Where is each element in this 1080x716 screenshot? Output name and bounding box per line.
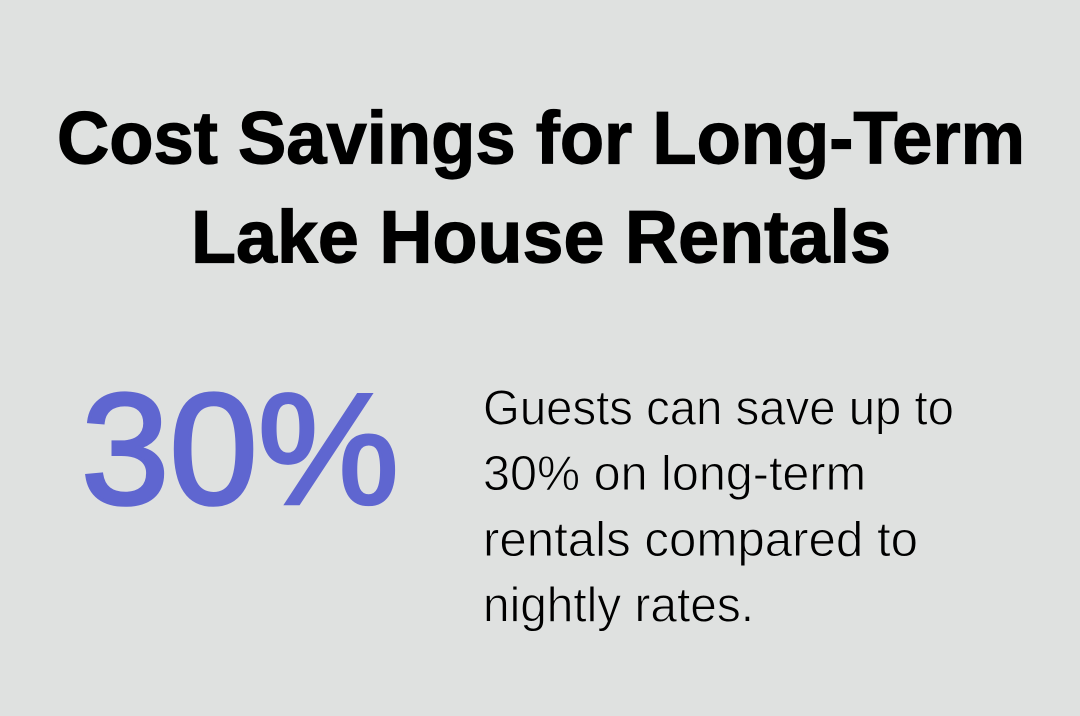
description text: 30% on long-term	[483, 446, 866, 501]
description text: nightly rates.	[483, 578, 754, 632]
description text: Guests can save up to	[483, 380, 954, 436]
description text	[483, 380, 954, 632]
description text: rentals compared to	[483, 512, 918, 567]
big stat: 30%: 30%	[81, 362, 399, 538]
title: Lake House Rentals	[191, 196, 891, 278]
title	[57, 96, 1025, 278]
title: Cost Savings for Long-Term	[57, 96, 1025, 180]
